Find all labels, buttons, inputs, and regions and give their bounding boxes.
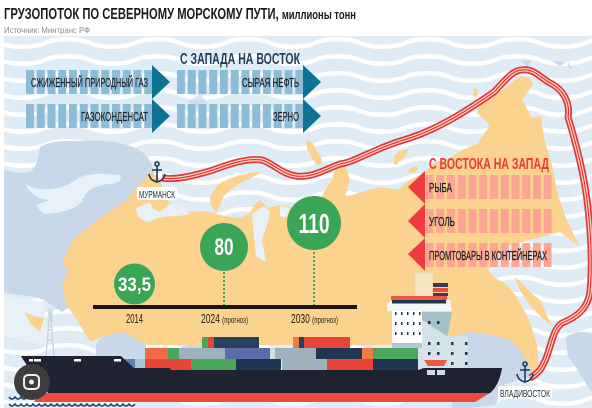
cargo arrow: gas condensate: ГАЗОКОНДЕНСАТ (81, 110, 148, 124)
data point: 2030 forecast: 2030 (прогноз) (291, 312, 338, 326)
ship hull (21, 356, 502, 393)
map: Baltic and Black Sea waters (4, 174, 121, 345)
cargo arrow: grain: ЗЕРНО (273, 110, 299, 124)
data point: 2030 forecast: 110 (298, 208, 330, 239)
cargo arrow: grain (177, 99, 321, 133)
cargo arrow: crude oil: СЫРАЯ НЕФТЬ (242, 76, 299, 90)
map: Europe and neighbours (4, 141, 592, 408)
source note: Источник: Минтранс РФ (4, 26, 90, 35)
map: northern islands (210, 88, 552, 326)
ship waterline (34, 393, 490, 402)
title: ГРУЗОПОТОК ПО СЕВЕРНОМУ МОРСКОМУ ПУТИ, миллионы тонн (4, 6, 356, 23)
cargo arrow: LNG (26, 65, 170, 99)
image search badge (14, 364, 50, 400)
cargo arrow: LNG: СЖИЖЕННЫЙ ПРИРОДНЫЙ ГАЗ (31, 75, 148, 90)
data point: 2014 (114, 264, 155, 326)
cargo arrow: containers (408, 238, 552, 271)
route: northern sea route (162, 70, 591, 378)
port: Murmansk: МУРМАНСК (139, 189, 176, 201)
cargo arrow: crude oil (177, 65, 321, 99)
data point: 2030 forecast (287, 196, 341, 326)
port: Vladivostok (498, 362, 552, 400)
map: white sea, gulfs and rivers (136, 203, 502, 272)
map: Russia (62, 76, 579, 372)
data point: 2014: 33,5 (118, 275, 151, 296)
small dark waves at bow (9, 397, 135, 406)
data point: 2024 forecast (200, 223, 248, 326)
cargo arrow: coal (408, 204, 552, 238)
cargo arrow: fish (408, 171, 552, 204)
data point: 2024 forecast: 2024 (прогноз) (201, 312, 248, 326)
data point: 2014: 2014 (126, 312, 143, 326)
port: Vladivostok: ВЛАДИВОСТОК (500, 388, 551, 400)
ship superstructure (387, 273, 468, 372)
ship containers (125, 337, 418, 370)
ship (21, 273, 502, 402)
map: kola patch (150, 196, 168, 212)
data point: 2024 forecast: 80 (214, 234, 234, 261)
port: Murmansk (137, 162, 177, 201)
heading: west to east: С ЗАПАДА НА ВОСТОК (180, 51, 300, 68)
map: small orange patch (24, 312, 44, 332)
cargo arrow: fish: РЫБА (429, 181, 452, 195)
map: small arctic islands (188, 60, 572, 110)
cargo arrow: gas condensate (26, 99, 170, 133)
ship mast (46, 308, 54, 356)
cargo arrow: coal: УГОЛЬ (429, 215, 455, 229)
timeline axis (93, 305, 357, 309)
